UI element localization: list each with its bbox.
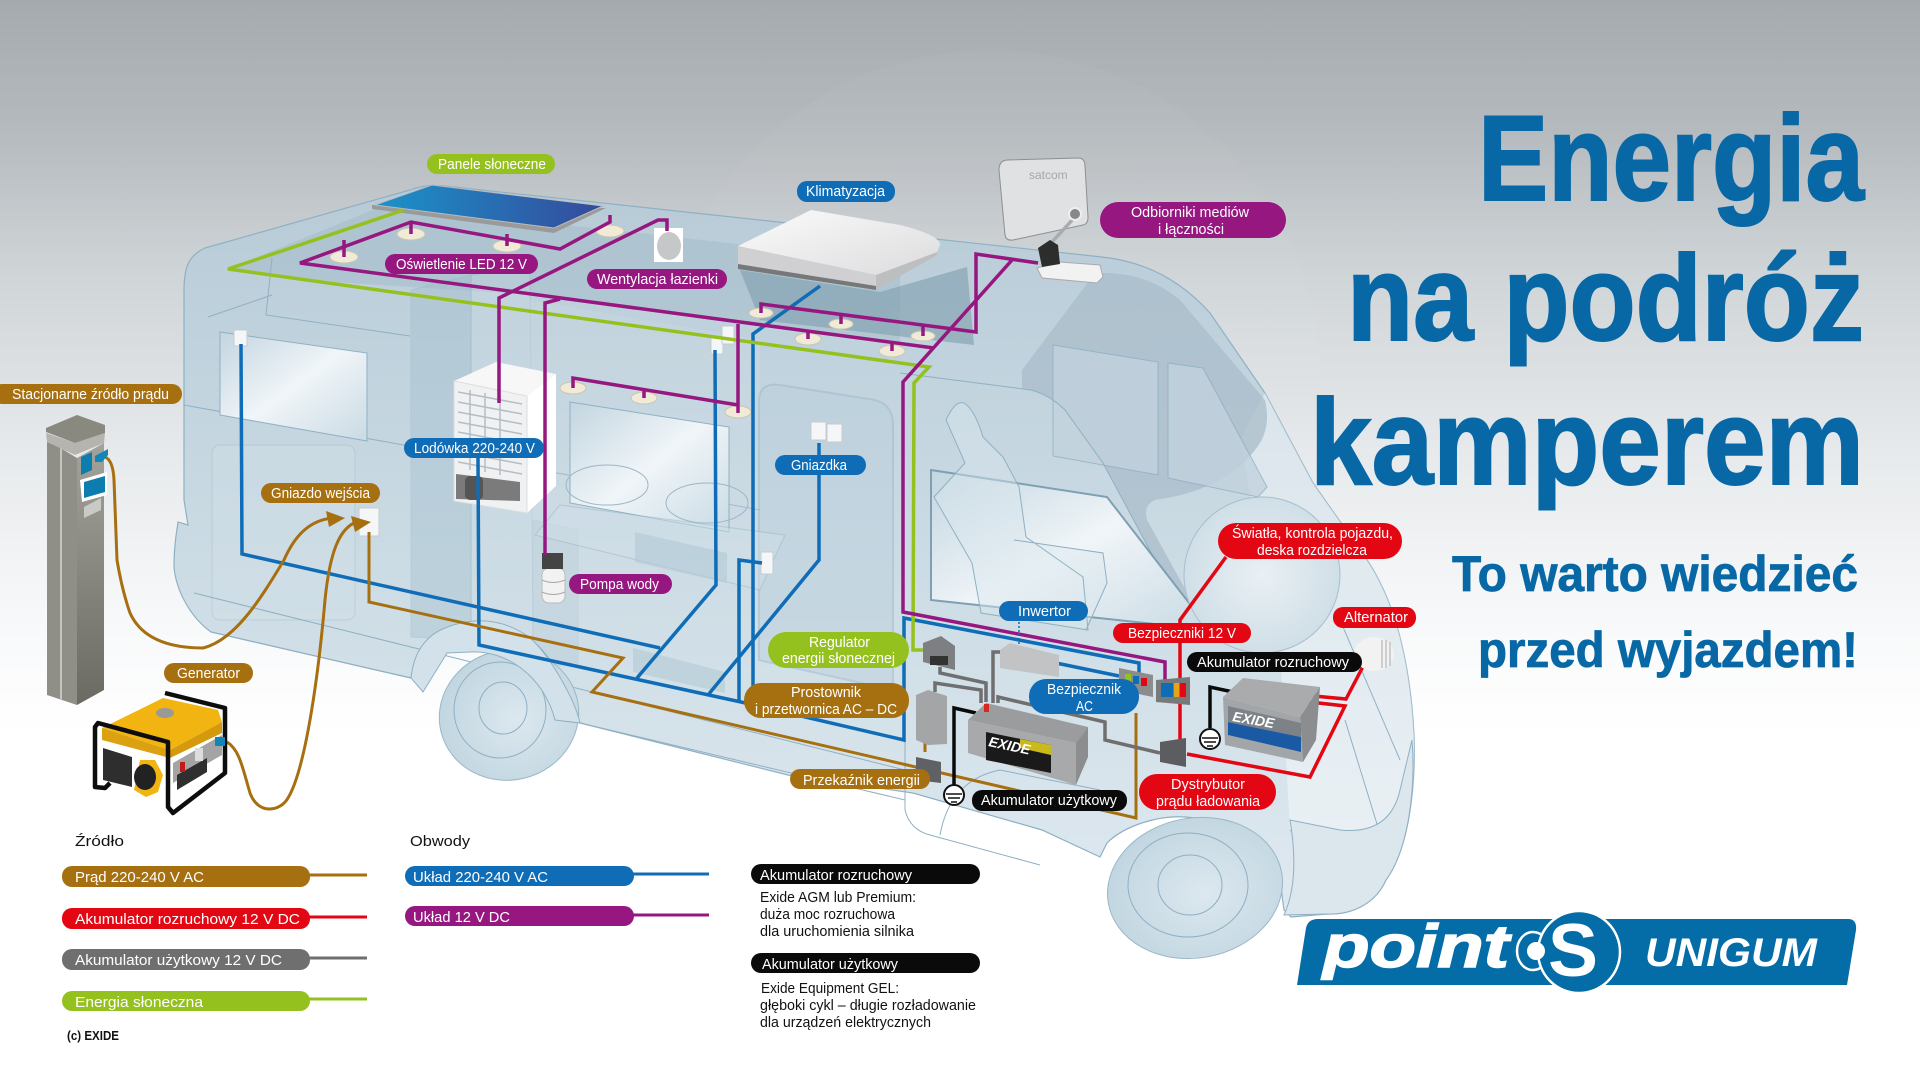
- label: Bezpiecznik AC: Bezpiecznik: [1047, 682, 1122, 698]
- legend heading: Obwody: Obwody: [410, 833, 471, 850]
- label: Regulator energii słonecznej: Regulator: [809, 635, 870, 651]
- rectifier box: [916, 690, 947, 745]
- label: Odbiorniki mediów i łączności: i łączności: [1158, 222, 1224, 238]
- label: Przekaźnik energii: Przekaźnik energii: [803, 773, 920, 789]
- legend item: starter battery: Akumulator rozruchowy 12 V DC: [75, 912, 300, 928]
- label: Inwertor: Inwertor: [1018, 604, 1071, 620]
- solar regulator box: [923, 636, 955, 670]
- bathroom vent: [654, 228, 683, 262]
- subtitle: [1452, 546, 1858, 678]
- label: Gniazdka: [775, 455, 866, 475]
- cab interior: [1022, 273, 1267, 625]
- label: Gniazdo wejścia: Gniazdo wejścia: [271, 486, 371, 502]
- label: Stacjonarne źródło prądu: Stacjonarne źródło prądu: [12, 387, 169, 403]
- AC fuse box: [1119, 668, 1153, 697]
- door in rear wall: [212, 445, 355, 620]
- legend item: 220-240 V circuit: [405, 866, 709, 886]
- battery note: leisure: dla urządzeń elektrycznych: [760, 1014, 931, 1031]
- table seats: [535, 465, 785, 590]
- label: Światła, kontrola pojazdu: Światła, kontrola pojazdu,: [1232, 524, 1393, 542]
- legend: Obwody: [405, 833, 709, 926]
- label: Lodówka: Lodówka 220-240 V: [414, 441, 535, 457]
- label: Odbiorniki mediów i łączności: Odbiorniki mediów: [1131, 205, 1250, 221]
- battery note: leisure: Akumulator użytkowy: [762, 957, 899, 973]
- legend item: AC mains: [62, 866, 367, 887]
- label: Wentylacja łazienki: Wentylacja łazienki: [597, 272, 718, 288]
- power post: [46, 415, 108, 705]
- logo: point S Unigum: point: [1320, 913, 1513, 980]
- legend item: solar energy: Energia słoneczna: [75, 995, 204, 1011]
- label: Akumulator użytkowy: [972, 790, 1127, 811]
- label: Dystrybutor prądu ładowania: prądu ładowania: [1156, 794, 1261, 810]
- blue circuit wires: [241, 286, 1139, 740]
- gray battery wires: [935, 652, 1160, 753]
- battery note: starter: [751, 864, 980, 940]
- starter battery: EXIDE: [1231, 708, 1276, 731]
- label: Prostownik: [744, 683, 909, 718]
- legend item: leisure battery: [62, 949, 367, 970]
- overhead cabinets: [184, 258, 760, 510]
- label: Bezpiecznik AC: [1029, 679, 1139, 715]
- dark roof box behind AC: [740, 267, 974, 345]
- battery note: leisure: [751, 953, 980, 1031]
- battery note: starter: Akumulator rozruchowy: [760, 868, 913, 884]
- legend item: 220-240 V circuit: Układ 220-240 V AC: [413, 870, 548, 886]
- solar panel: [372, 185, 606, 233]
- label: Prostownik: i przetwornica AC – DC: [755, 702, 897, 718]
- ground wires: [944, 687, 1233, 805]
- legend item: 12 V circuit: [405, 906, 709, 926]
- red 12 V wires: [1180, 557, 1368, 777]
- cab seat window: [931, 470, 1210, 630]
- air conditioner: [738, 210, 940, 290]
- wall sockets: [234, 326, 842, 574]
- rear wheel: [425, 634, 593, 796]
- water pump: [542, 553, 565, 603]
- legend heading: Źródło: Źródło: [75, 833, 124, 850]
- 12 V fuse box: [1156, 677, 1190, 705]
- energy relay box: [916, 757, 941, 783]
- windshield bulge: [1184, 497, 1340, 653]
- entry door: [759, 385, 893, 690]
- starter battery: [1223, 678, 1320, 762]
- logo: point S Unigum: [1297, 908, 1856, 993]
- battery note: starter: dla uruchomienia silnika: [760, 923, 915, 940]
- label: Akumulator użytkowy: Akumulator użytkowy: [981, 793, 1118, 809]
- dotted inverter link: [1018, 622, 1020, 658]
- label: Generator: Generator: [177, 666, 240, 682]
- title: [1310, 90, 1865, 510]
- label: Prostownik: Prostownik: [791, 685, 862, 701]
- ceiling lights: [330, 225, 935, 418]
- leisure battery: [968, 703, 1088, 785]
- battery note: starter: Exide AGM lub Premium:: [760, 889, 916, 906]
- copyright: (c) EXIDE: [67, 1028, 119, 1043]
- logo: point S Unigum: S: [1548, 908, 1598, 992]
- label: Alternator: [1333, 607, 1416, 628]
- rear fender: [411, 621, 580, 723]
- label: Dystrybutor prądu ładowania: [1139, 774, 1276, 810]
- label: Pompa wody: [569, 574, 672, 594]
- battery note: leisure: głęboki cykl – długie rozładowanie: [760, 997, 976, 1014]
- label: Inwertor: [999, 601, 1088, 621]
- label: Odbiorniki mediów i łączności: [1100, 202, 1286, 238]
- van body shell: [174, 186, 1414, 917]
- middle window: [570, 402, 729, 532]
- label: Panele słoneczne: Panele słoneczne: [438, 157, 546, 173]
- label: Alternator: Alternator: [1344, 610, 1408, 626]
- leisure battery: EXIDE: [987, 733, 1032, 758]
- label: Oświetlenie LED 12 V: Oświetlenie LED 12 V: [396, 257, 527, 273]
- brown AC wires: [105, 457, 1136, 818]
- legend: Źródło: [62, 833, 367, 1011]
- cab window rear: [1053, 345, 1158, 475]
- title: na podróż: [1347, 230, 1864, 366]
- battery note: starter: duża moc rozruchowa: [760, 906, 896, 923]
- legend item: AC mains: Prąd 220-240 V AC: [75, 870, 204, 886]
- roof interior band: [228, 205, 900, 345]
- inverter box: [1000, 643, 1059, 677]
- cabinet columns: [411, 275, 471, 640]
- label: Regulator energii słonecznej: energii słonecznej: [782, 651, 895, 667]
- side wall lines: [194, 593, 1400, 870]
- subtitle: To warto wiedzieć: [1452, 546, 1858, 602]
- title: kamperem: [1310, 374, 1864, 510]
- title: Energia: [1478, 90, 1865, 226]
- label: Bezpieczniki 12 V: [1113, 623, 1251, 643]
- label: Generator: [164, 663, 253, 683]
- label: Gniazdka: Gniazdka: [791, 458, 848, 474]
- label: Akumulator rozruchowy: [1187, 652, 1362, 672]
- subtitle: przed wyjazdem!: [1478, 622, 1858, 678]
- label: Akumulator rozruchowy: Akumulator rozruchowy: [1197, 655, 1350, 671]
- green solar wire: [228, 210, 929, 650]
- label: Bezpieczniki 12 V: Bezpieczniki 12 V: [1128, 626, 1236, 642]
- label: Pompa wody: Pompa wody: [580, 577, 660, 593]
- purple 12 V wires: [300, 215, 1165, 682]
- legend item: solar energy: [62, 991, 367, 1011]
- satellite dish: [999, 158, 1103, 283]
- satellite dish: satcom: [1029, 168, 1068, 182]
- A-pillar wall line: [900, 373, 1205, 640]
- front bumper: [1284, 740, 1413, 915]
- label: Przekaźnik energii: [790, 769, 930, 789]
- post sockets: [80, 449, 108, 518]
- label: Regulator energii słonecznej: [768, 632, 909, 668]
- label: Dystrybutor prądu ładowania: Dystrybutor: [1171, 777, 1245, 793]
- label: Klimatyzacja: Klimatyzacja: [806, 184, 886, 200]
- alternator: [1354, 637, 1394, 671]
- cab window front: [1168, 363, 1267, 497]
- battery note: leisure: Exide Equipment GEL:: [761, 980, 899, 997]
- label: Światła, kontrola pojazdu: deska rozdzielcza: [1257, 543, 1368, 559]
- charge distributor box: [1160, 738, 1186, 767]
- fridge: [454, 362, 556, 513]
- logo: point S Unigum: UNIGUM: [1645, 931, 1819, 975]
- legend item: leisure battery: Akumulator użytkowy 12 V DC: [75, 953, 282, 969]
- cab seat: [934, 403, 1107, 630]
- legend item: starter battery: [62, 908, 367, 929]
- floor vents: [633, 532, 727, 693]
- label: Bezpiecznik AC: AC: [1076, 699, 1093, 715]
- generator: [95, 693, 225, 813]
- label: Światła, kontrola pojazdu: [1218, 523, 1402, 559]
- hood overlay: [1240, 393, 1414, 880]
- legend item: 12 V circuit: Układ 12 V DC: [413, 910, 510, 926]
- left window: [220, 332, 367, 441]
- front wheel: [1096, 804, 1294, 972]
- label: Klimatyzacja: [797, 181, 895, 202]
- camper van: [174, 186, 1414, 972]
